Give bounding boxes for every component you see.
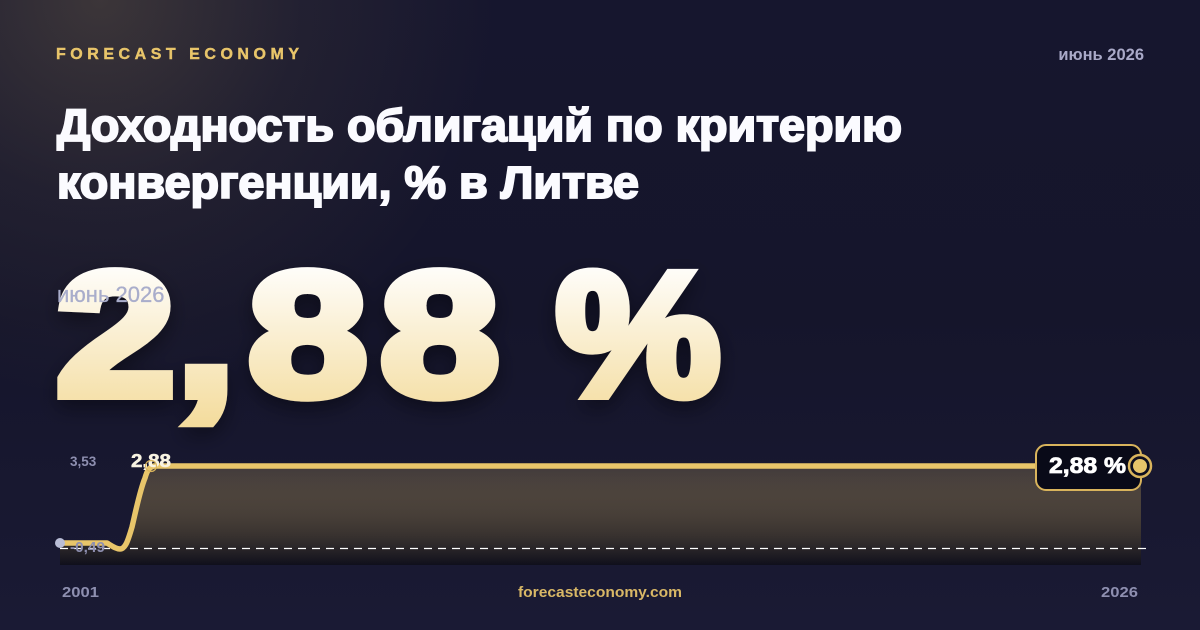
peak marker <box>146 460 156 472</box>
start marker <box>55 538 65 548</box>
chart area fill <box>60 466 1141 565</box>
date top right: июнь 2026 <box>1058 46 1144 64</box>
start year: 2001 <box>62 584 99 601</box>
series line <box>60 466 1141 549</box>
value badge: 2,88 % <box>1049 453 1126 478</box>
end marker <box>1129 455 1151 477</box>
subtitle date overlapping value: июнь 2026 <box>57 282 164 307</box>
title: Доходность облигаций по критерию <box>57 100 902 151</box>
source: forecasteconomy.com <box>518 584 682 601</box>
title: конвергенции, % в Литве <box>57 157 639 208</box>
big value <box>56 235 720 433</box>
big value: % <box>556 237 720 433</box>
peak label: 2,88 <box>131 451 171 471</box>
value badge <box>1036 445 1141 490</box>
end year: 2026 <box>1101 584 1138 601</box>
chart <box>55 445 1151 565</box>
axis max label: 3,53 <box>70 454 97 469</box>
title <box>57 100 902 208</box>
axis min label: -0,49 <box>70 539 105 556</box>
baseline <box>60 548 1147 550</box>
big value: 2,88 <box>56 235 499 433</box>
brand label: FORECAST ECONOMY <box>56 46 299 63</box>
